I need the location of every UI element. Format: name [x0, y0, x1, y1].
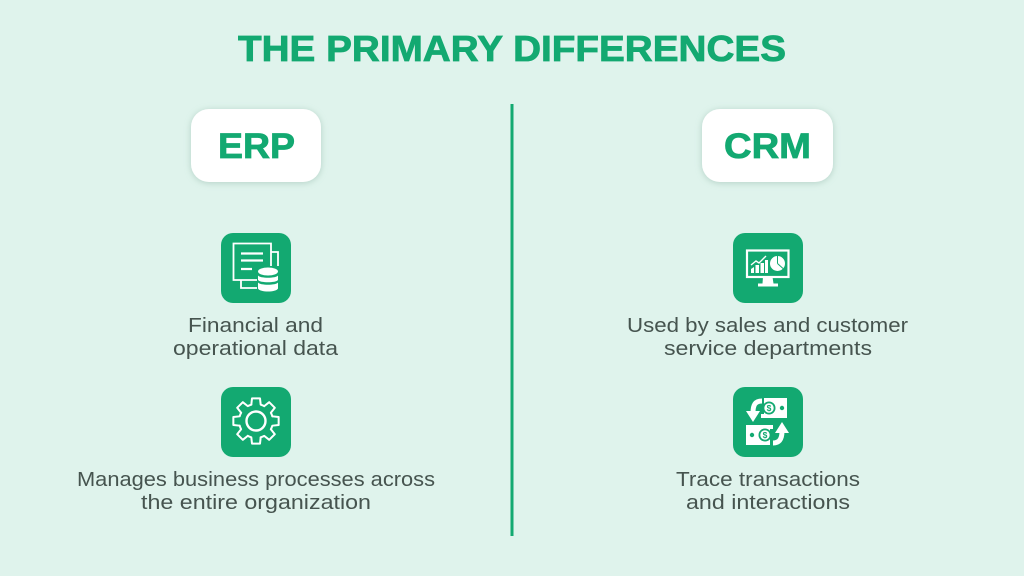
text: financial data: operational data [173, 338, 339, 360]
center divider [510, 104, 514, 536]
ERP badge: ERP [218, 127, 295, 166]
text: sales and customer service: Used by sales and customer [627, 315, 908, 337]
icon: document with database [221, 233, 291, 303]
icon: money transfer: $ [763, 430, 768, 440]
text: sales and customer service [627, 315, 908, 360]
text: financial data [173, 315, 339, 360]
text: transactions: and interactions [686, 492, 850, 514]
text: business processes: Manages business processes across [77, 469, 435, 491]
text: transactions: Trace transactions [676, 469, 860, 491]
text: financial data: Financial and [188, 315, 323, 337]
title: THE PRIMARY DIFFERENCES [238, 28, 786, 69]
panel: ERP column [77, 109, 435, 514]
text: business processes: the entire organization [141, 492, 371, 514]
CRM badge: CRM [724, 127, 811, 166]
icon: monitor with charts [733, 233, 803, 303]
CRM badge [702, 109, 833, 182]
panel: CRM column [627, 109, 908, 514]
text: business processes [77, 469, 435, 514]
icon: money transfer [733, 387, 803, 457]
ERP badge [191, 109, 321, 182]
text: transactions [676, 469, 860, 514]
text: sales and customer service: service departments [664, 338, 872, 360]
icon: money transfer: $ [767, 403, 772, 413]
icon: gear [221, 387, 291, 457]
